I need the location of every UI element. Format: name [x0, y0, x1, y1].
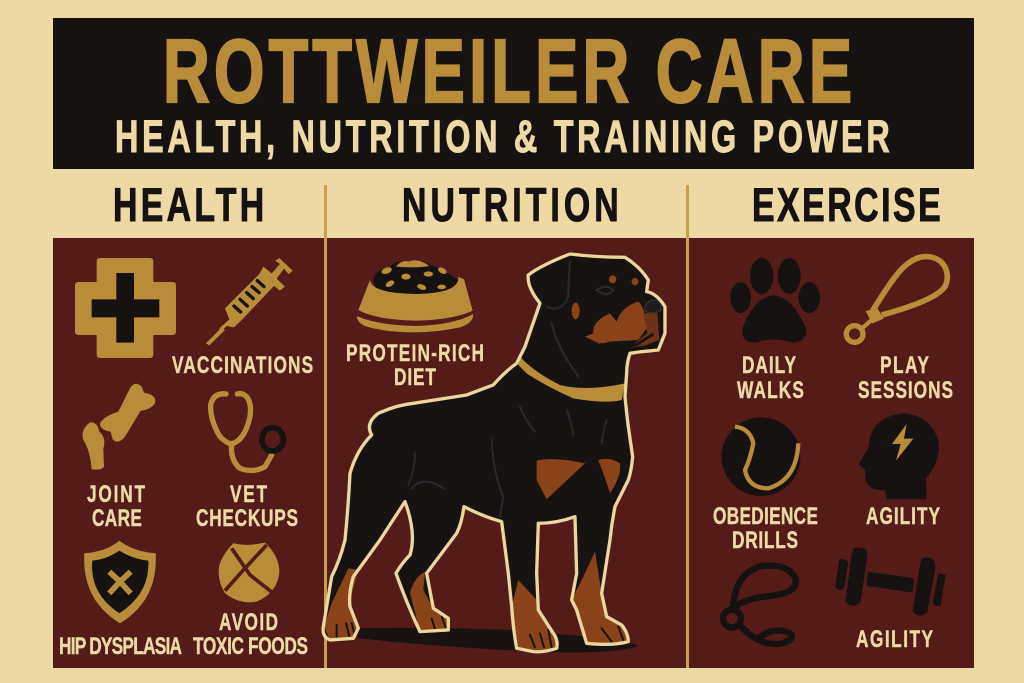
icon: dumbbell [835, 548, 946, 616]
icon: paw [730, 258, 820, 342]
panel: nutrition [323, 254, 665, 652]
icon: shield [84, 541, 156, 623]
label: joint care: CARE [92, 505, 142, 532]
label: daily walks [737, 352, 804, 404]
label: vet checkups [196, 481, 298, 532]
icon: rope leash [723, 566, 796, 644]
dog details [408, 262, 613, 517]
label: avoid toxic foods: AVOID [219, 609, 278, 636]
icon: crossed food [219, 543, 279, 602]
label: obedience drills: OBEDIENCE [713, 503, 818, 530]
heading: nutrition: NUTRITION [402, 179, 619, 231]
label: vaccinations: VACCINATIONS [172, 352, 313, 379]
label: vet checkups: CHECKUPS [196, 505, 298, 532]
label: hip dysplasia: HIP DYSPLASIA [59, 633, 182, 660]
label: obedience drills [713, 503, 818, 554]
heading: exercise: EXERCISE [752, 179, 941, 231]
icon: medical cross [75, 258, 176, 358]
tan markings [324, 568, 358, 640]
label: agility: AGILITY [866, 503, 940, 530]
icon: bone joint [82, 384, 155, 470]
label: vet checkups: VET [230, 481, 267, 508]
title: ROTTWEILER CARE [163, 21, 852, 122]
nose and mouth [630, 312, 659, 347]
collar [518, 357, 625, 402]
label: avoid toxic foods: TOXIC FOODS [193, 633, 308, 660]
panel: exercise [713, 257, 953, 653]
icon: food bowl [357, 260, 473, 332]
icon: tennis ball [722, 417, 800, 496]
panel background [53, 238, 974, 668]
label: play sessions: SESSIONS [858, 377, 953, 404]
panel: health [59, 258, 313, 660]
icon: head with lightning [859, 413, 939, 499]
label: obedience drills: DRILLS [732, 527, 798, 554]
subtitle: HEALTH, NUTRITION & TRAINING POWER [115, 113, 890, 162]
illustration: rottweiler [323, 254, 665, 652]
toes [337, 617, 624, 647]
icon: leash [846, 257, 947, 342]
icon: stethoscope [211, 394, 283, 470]
label: protein-rich diet [346, 340, 484, 391]
label: protein-rich diet: PROTEIN-RICH [346, 340, 484, 367]
dog body [323, 254, 665, 652]
icon: syringe [206, 258, 293, 345]
label: protein-rich diet: DIET [394, 364, 436, 391]
dog outline [323, 254, 665, 652]
label: daily walks: WALKS [737, 377, 804, 404]
label: agility second: AGILITY [856, 626, 933, 653]
label: play sessions: PLAY [880, 352, 929, 379]
label: daily walks: DAILY [742, 352, 796, 379]
ground shadow [357, 628, 637, 652]
label: joint care [87, 481, 145, 532]
label: play sessions [858, 352, 953, 404]
header banner [53, 18, 974, 169]
heading: health: HEALTH [113, 179, 264, 231]
label: joint care: JOINT [87, 481, 145, 508]
label: avoid toxic foods [193, 609, 308, 660]
